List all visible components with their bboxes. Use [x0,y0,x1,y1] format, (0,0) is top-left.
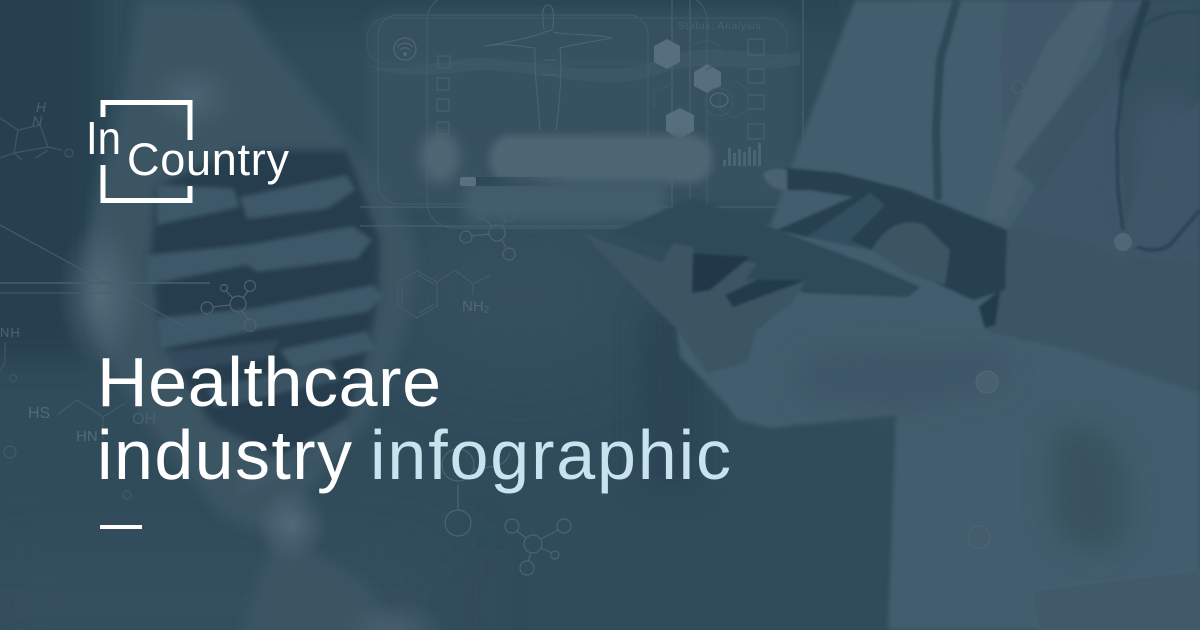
dna core [150,150,380,468]
molecules: NH [0,325,21,340]
light rays [0,225,210,330]
logo [86,102,290,200]
doctor [583,0,1200,630]
hud panel [360,0,803,300]
molecules: H [36,99,47,115]
logo: Country [127,134,290,185]
molecules: OH [132,411,156,428]
molecules [0,99,571,575]
hud brain icon [710,93,728,107]
title: industry [97,416,352,494]
molecules: N [32,113,43,129]
molecules: HN [76,428,98,445]
coat [677,0,1200,630]
title: Healthcare [97,343,441,421]
hud square icons [437,39,764,139]
title: infographic [370,416,731,494]
logo: In [86,112,121,164]
molecules: HS [28,405,50,422]
coat pocket [1031,570,1200,630]
hud status text: Status: Analysis [678,21,761,32]
right hand [770,168,1007,300]
molecules: NH₂ [462,298,490,315]
tablet [613,198,920,297]
title [97,343,731,494]
dna helix [58,0,446,630]
hud wifi icon [394,38,416,60]
hud hexagons [654,39,721,139]
hud bar chart [723,143,761,166]
stethoscope [936,0,1200,250]
coat buttons [968,81,1024,548]
hud glow [420,131,712,222]
left hand [583,233,807,373]
hud body figure [484,5,612,130]
stethoscope chest piece [1114,233,1132,251]
hands and tablet [583,168,1007,373]
accent dash [100,525,142,529]
stylus [460,177,570,186]
